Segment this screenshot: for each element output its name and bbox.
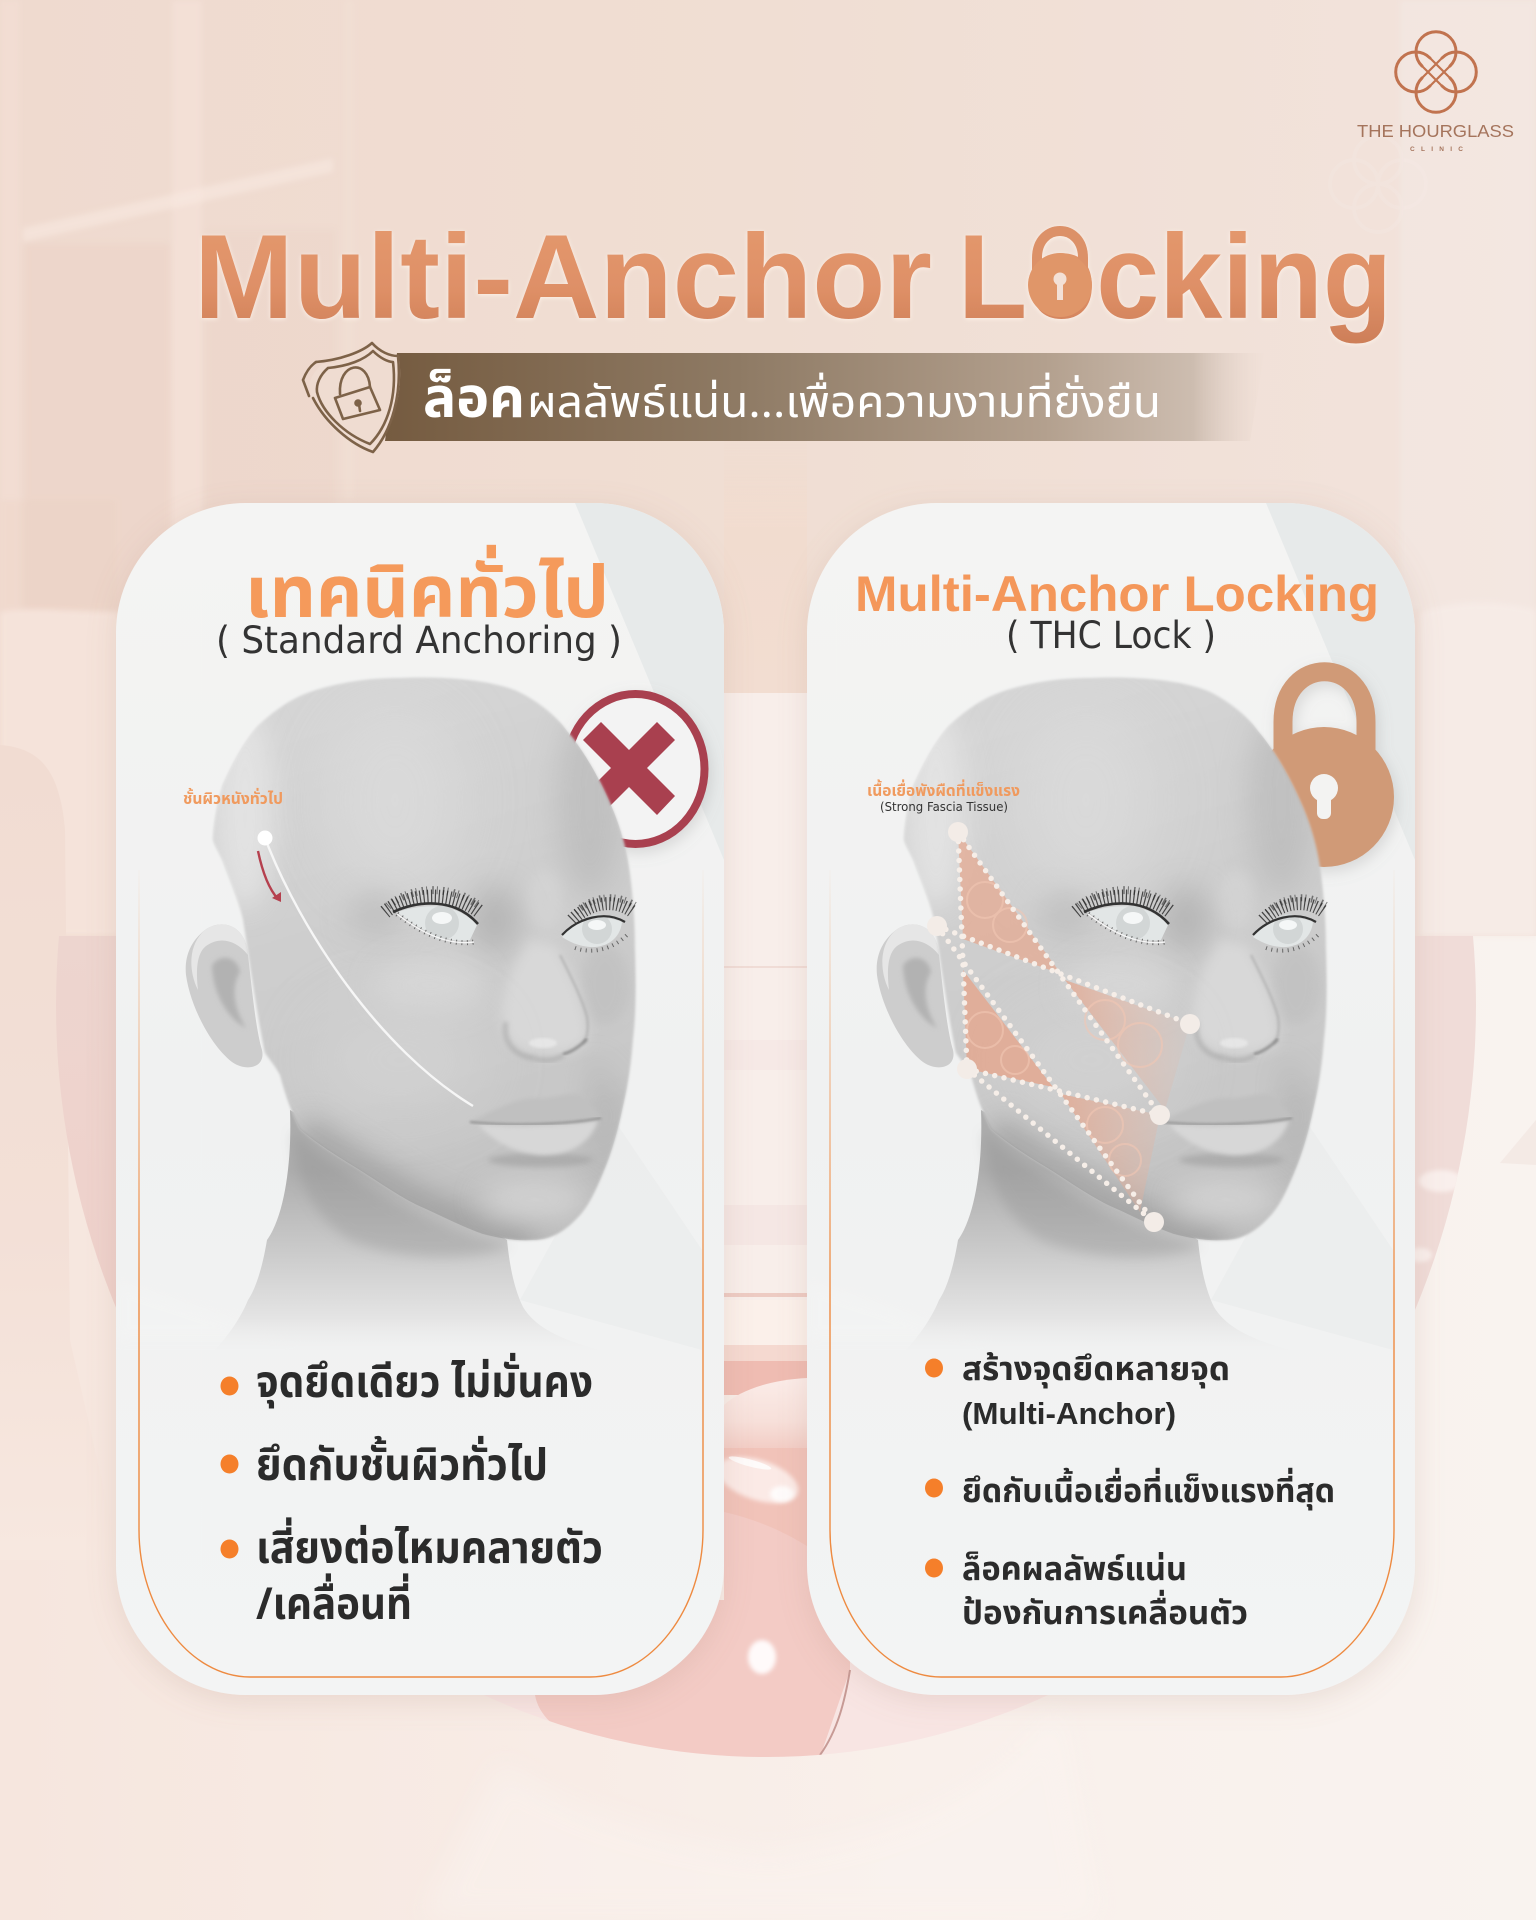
title bbox=[194, 210, 1392, 344]
thread line with anchor dot bbox=[258, 830, 473, 1106]
logo caption: CLINIC bbox=[1410, 146, 1463, 153]
anchor points bbox=[927, 822, 1200, 1232]
bullet 2: ยึดกับเนื้อเยื่อที่แข็งแรงที่สุด bbox=[962, 1467, 1335, 1517]
label: strong fascia tissue bbox=[867, 779, 1020, 814]
logo watermark bbox=[1330, 136, 1426, 232]
subtitle text: ผลลัพธ์แน่น...เพื่อความงามที่ยั่งยืน bbox=[527, 370, 1161, 437]
pearl capsules between the panels bbox=[535, 1345, 1047, 1757]
bullet 2: ยึดกับชั้นผิวทั่วไป bbox=[256, 1433, 548, 1500]
head illustration bbox=[877, 678, 1327, 1355]
heading: Multi-Anchor Locking bbox=[855, 566, 1379, 622]
label: strong fascia tissue: เนื้อเยื่อพังผืดที่แข็งแรง bbox=[867, 779, 1020, 804]
subtitle text bbox=[423, 359, 1161, 443]
logo wordmark: THE HOURGLASS bbox=[1357, 121, 1514, 141]
tissue triangles bbox=[958, 832, 1190, 1212]
bullet 3: เสี่ยงต่อไหมคลายตัว bbox=[256, 1516, 603, 1583]
icon: padlock bbox=[1254, 672, 1394, 867]
bullet 1: สร้างจุดยึดหลายจุด bbox=[962, 1345, 1230, 1395]
subtitle text: ล็อค bbox=[423, 359, 525, 443]
logo mark bbox=[1396, 32, 1476, 112]
bullet list bbox=[925, 1345, 1335, 1639]
bullet 1 bbox=[925, 1345, 1230, 1431]
subheading: ( Standard Anchoring ) bbox=[216, 619, 622, 662]
icon: red cross bbox=[566, 694, 704, 844]
bullet 3 bbox=[220, 1516, 603, 1639]
icon: padlock in title bbox=[1028, 231, 1092, 317]
bullet 1: จุดยึดเดียว ไม่มั่นคง bbox=[256, 1350, 593, 1417]
bullet list bbox=[220, 1350, 603, 1639]
label: strong fascia tissue: (Strong Fascia Tissue) bbox=[880, 800, 1008, 814]
panel: multi-anchor locking bbox=[807, 503, 1415, 1695]
logo: The Hourglass Clinic bbox=[1330, 32, 1514, 232]
icon: shield with padlock bbox=[303, 343, 400, 452]
title: Locking bbox=[958, 210, 1392, 344]
bullet 1: (Multi-Anchor) bbox=[962, 1396, 1176, 1431]
heading: เทคนิคทั่วไป bbox=[245, 542, 609, 650]
head illustration bbox=[186, 678, 636, 1355]
bullet 3: ป้องกันการเคลื่อนตัว bbox=[962, 1589, 1248, 1639]
dotted anchor lines bbox=[937, 832, 1190, 1222]
bullet 3: /เคลื่อนที่ bbox=[256, 1572, 412, 1639]
subheading: ( THC Lock ) bbox=[1006, 614, 1216, 657]
subtitle banner bbox=[385, 353, 1264, 443]
bullet 3 bbox=[925, 1545, 1248, 1639]
bullet 3: ล็อคผลลัพธ์แน่น bbox=[962, 1545, 1187, 1595]
title: Multi-Anchor bbox=[194, 210, 932, 344]
label: skin layer: ชั้นผิวหนังทั่วไป bbox=[183, 788, 283, 812]
panel: standard anchoring bbox=[116, 503, 724, 1695]
